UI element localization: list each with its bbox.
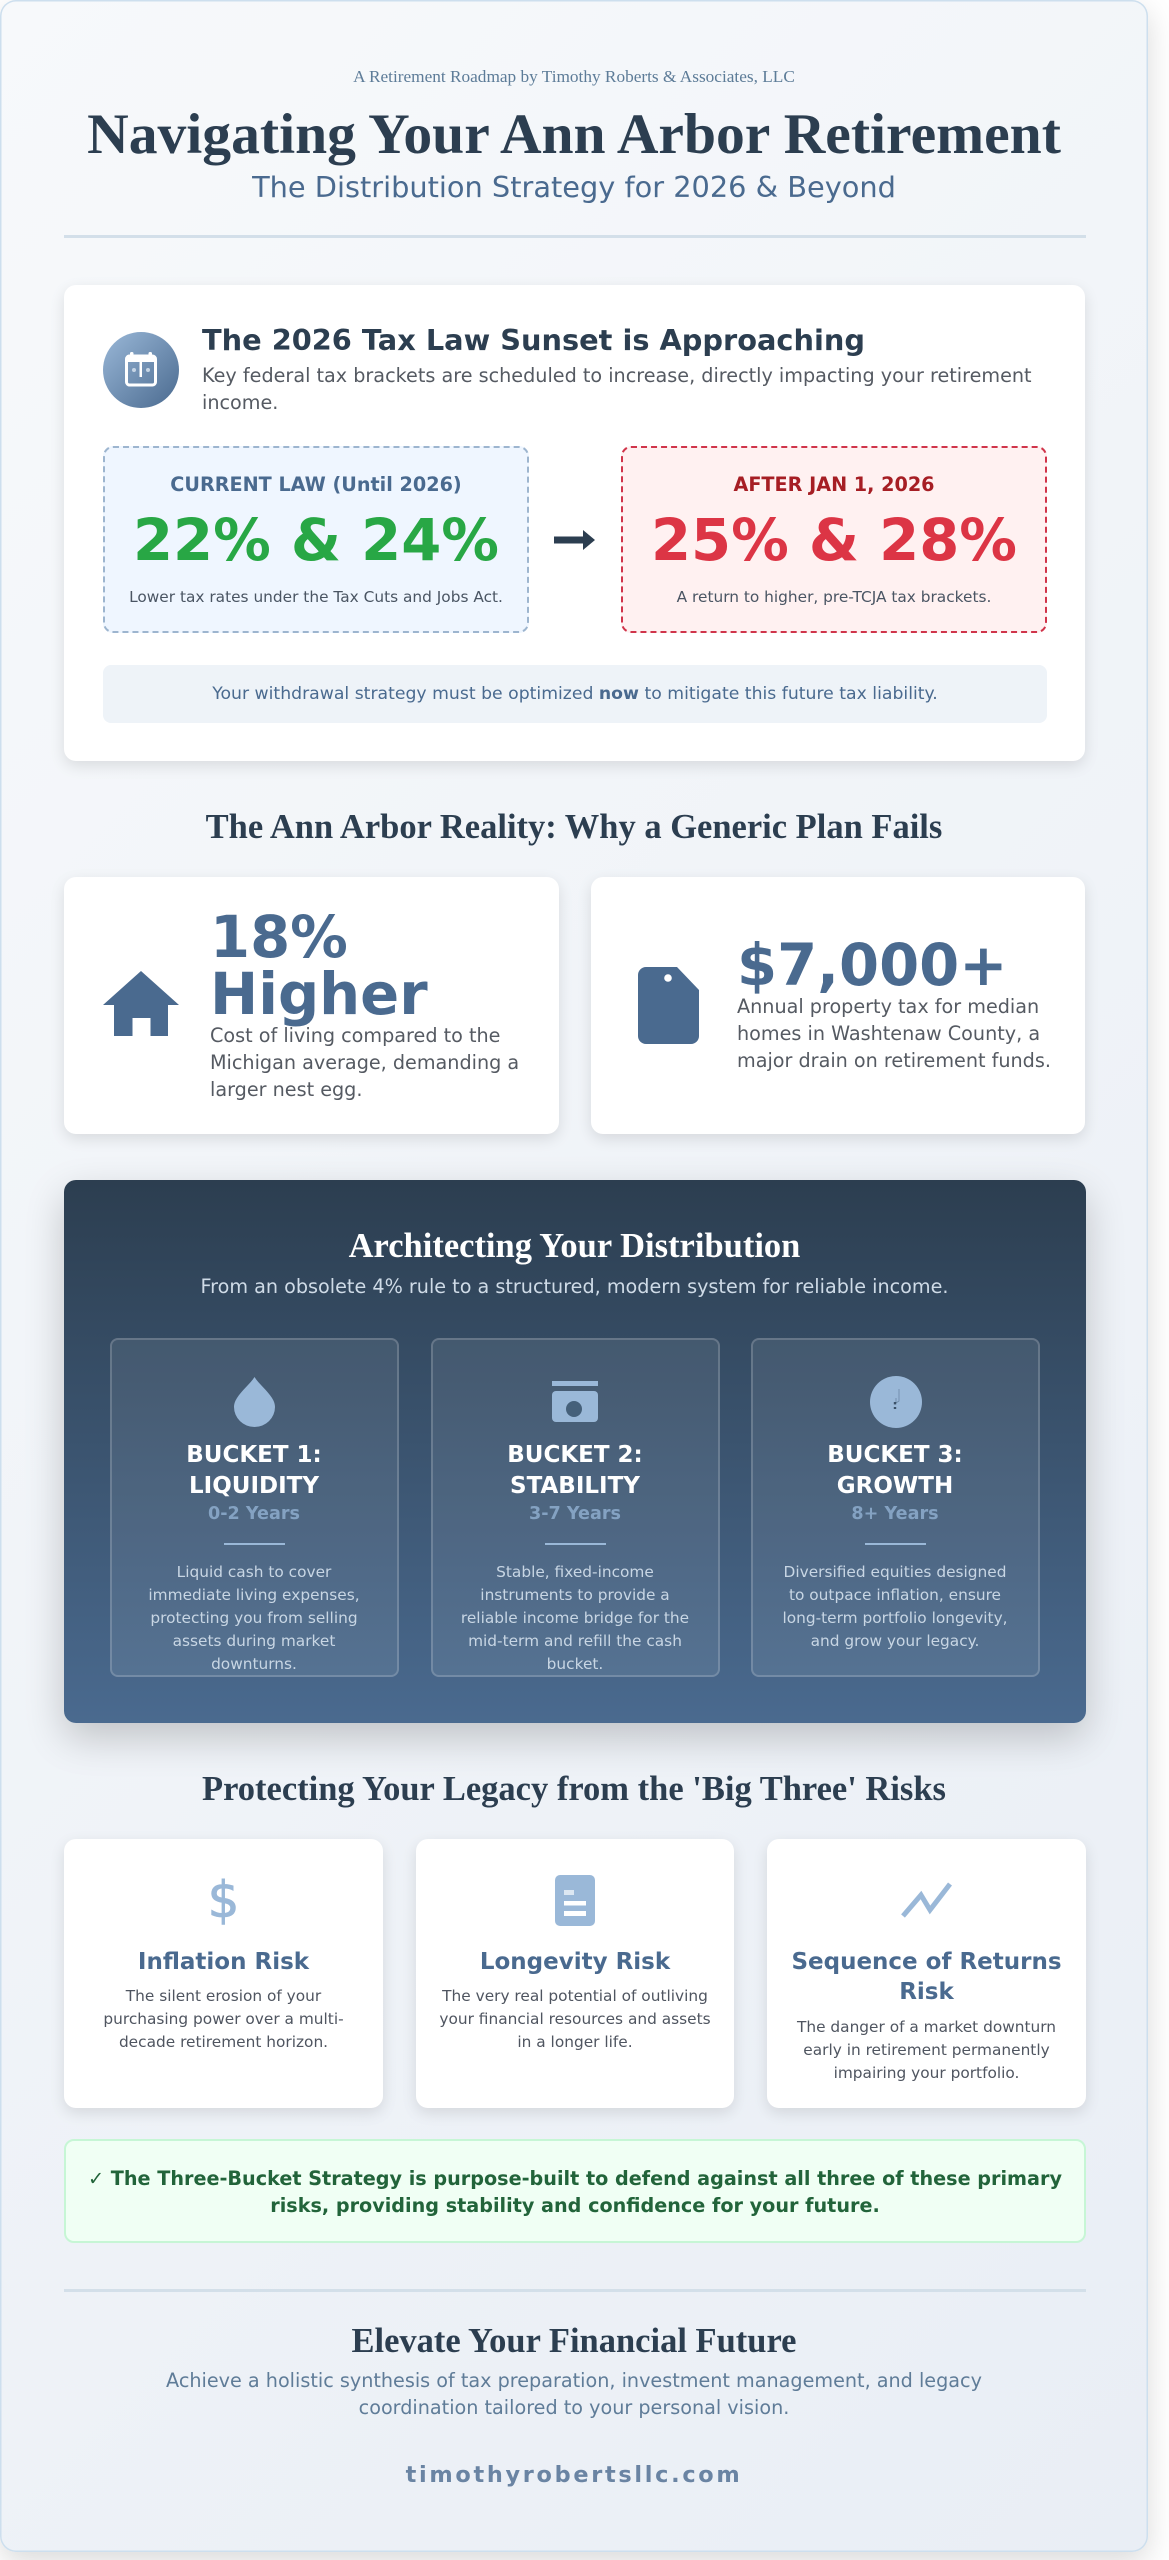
bucket description: Diversified equities designed [784, 1562, 1006, 1580]
risk description: The very real potential of outliving [442, 1986, 708, 2004]
stat description: Annual property tax for median [737, 995, 1039, 1018]
icon: water drop [234, 1377, 275, 1427]
bucket description: mid-term and refill the cash [468, 1632, 682, 1650]
icon: growth circle [870, 1376, 922, 1428]
bucket title: STABILITY [510, 1472, 640, 1498]
bucket title [827, 1442, 963, 1498]
bucket title [507, 1442, 643, 1498]
bucket title: BUCKET 1: [186, 1442, 322, 1468]
bucket description [782, 1562, 1008, 1650]
bucket description: long-term portfolio longevity, [782, 1608, 1008, 1626]
bucket description [461, 1562, 689, 1672]
callout: withdrawal strategy: Your withdrawal strategy must be optimized now to mitigate this future tax liability. [212, 684, 938, 704]
risk card: longevity [416, 1839, 734, 2108]
bucket description: assets during market [173, 1632, 335, 1650]
bucket years: 3-7 Years [529, 1504, 621, 1524]
bucket title: BUCKET 2: [507, 1442, 643, 1468]
panel: tax law sunset [64, 284, 1085, 760]
risk description: early in retirement permanently [803, 2040, 1050, 2058]
title: Navigating Your Ann Arbor Retirement [87, 103, 1061, 166]
bucket description: and grow your legacy. [811, 1632, 979, 1650]
current law label: CURRENT LAW (Until 2026) [170, 472, 462, 496]
bucket 3 [750, 1338, 1040, 1677]
panel: architecting your distribution [64, 1180, 1086, 1723]
bucket description: immediate living expenses, [148, 1586, 360, 1604]
stat description [210, 1024, 519, 1101]
intro text: Key federal tax brackets are scheduled to increase, directly impacting your retirement [202, 364, 1032, 386]
stat value: Higher [210, 961, 428, 1028]
stat value [210, 904, 428, 1028]
callout text [88, 2166, 1062, 2216]
intro text: income. [202, 390, 278, 414]
risk description: your financial resources and assets [439, 2010, 711, 2028]
stat description: homes in Washtenaw County, a [737, 1022, 1040, 1045]
after 2026 note: A return to higher, pre-TCJA tax brackets. [677, 588, 991, 606]
panel heading: Architecting Your Distribution [349, 1227, 800, 1265]
bucket description: bucket. [547, 1654, 603, 1672]
risk title: Sequence of Returns [791, 1949, 1062, 1975]
risk card: inflation [64, 1839, 383, 2108]
panel subheading: From an obsolete 4% rule to a structured, modern system for reliable income. [200, 1275, 949, 1298]
bucket description: reliable income bridge for the [461, 1608, 689, 1626]
risk description: The danger of a market downturn [797, 2018, 1056, 2036]
risk description [796, 2018, 1056, 2082]
callout text: ✓ The Three-Bucket Strategy is purpose-built to defend against all three of these primary [88, 2166, 1062, 2190]
website: timothyrobertsllc.com [406, 2462, 742, 2488]
risk description [103, 1986, 344, 2050]
bucket title [186, 1442, 322, 1498]
callout text: risks, providing stability and confidence for your future. [270, 2194, 880, 2216]
bucket title: BUCKET 3: [827, 1442, 963, 1468]
bucket title: LIQUIDITY [189, 1472, 319, 1498]
callout: withdrawal strategy [103, 664, 1047, 722]
risk title: Inflation Risk [138, 1949, 309, 1975]
bucket title: GROWTH [837, 1472, 953, 1498]
stat description [737, 995, 1051, 1072]
bucket 2 [430, 1338, 720, 1677]
icon: document [555, 1875, 595, 1926]
icon: dollar sign: $ [208, 1871, 239, 1929]
risk description: decade retirement horizon. [119, 2032, 328, 2050]
bucket 1 [110, 1338, 398, 1677]
future rates: 25% & 28% [651, 507, 1017, 574]
footer text [166, 2368, 982, 2418]
bucket description: instruments to provide a [480, 1586, 670, 1604]
risk card: sequence of returns [767, 1839, 1086, 2108]
heading: The 2026 Tax Law Sunset is Approaching [202, 323, 865, 357]
risk description: purchasing power over a multi- [103, 2010, 344, 2028]
current law box [103, 446, 529, 633]
heading: Ann Arbor reality: The Ann Arbor Reality: Why a Generic Plan Fails [206, 808, 942, 846]
heading: big three risks: Protecting Your Legacy from the 'Big Three' Risks [202, 1770, 946, 1808]
stat value: $7,000+ [737, 932, 1008, 999]
after 2026 label: AFTER JAN 1, 2026 [733, 472, 935, 496]
risk title: Risk [899, 1979, 954, 2005]
risk description: The silent erosion of your [126, 1986, 321, 2004]
stat description: major drain on retirement funds. [737, 1049, 1051, 1072]
bucket description: Stable, fixed-income [496, 1562, 654, 1580]
current law note: Lower tax rates under the Tax Cuts and Jobs Act. [129, 588, 503, 606]
icon: line chart [901, 1882, 952, 1918]
icon: price tag [638, 967, 699, 1044]
bucket description: to outpace inflation, ensure [789, 1586, 1001, 1604]
bucket description: Liquid cash to cover [177, 1562, 331, 1580]
stat card: cost of living [64, 877, 558, 1134]
intro text [202, 364, 1032, 414]
stat card: property tax [591, 877, 1085, 1134]
stat description: Cost of living compared to the [210, 1024, 500, 1047]
stat value: 18% [210, 904, 348, 971]
icon: cash box [552, 1381, 598, 1422]
bucket description: protecting you from selling [150, 1608, 358, 1626]
risk description: in a longer life. [517, 2032, 633, 2050]
risk title: Longevity Risk [480, 1949, 670, 1975]
icon: house [103, 971, 179, 1036]
icon: calendar [103, 332, 179, 408]
bucket years: 8+ Years [851, 1504, 939, 1524]
stat description: larger nest egg. [210, 1078, 362, 1101]
callout: three-bucket strategy [64, 2139, 1086, 2243]
risk title [791, 1949, 1062, 2005]
footer text: coordination tailored to your personal vision. [359, 2396, 789, 2418]
current rates: 22% & 24% [133, 507, 499, 574]
after 2026 box [621, 446, 1047, 633]
bucket years: 0-2 Years [208, 1504, 300, 1524]
bucket description [148, 1562, 360, 1672]
arrow [554, 530, 595, 550]
risk description [439, 1986, 711, 2050]
bucket description: downturns. [211, 1654, 297, 1672]
subtitle: The Distribution Strategy for 2026 & Beyond [252, 170, 896, 204]
footer heading: Elevate Your Financial Future [352, 2322, 796, 2360]
risk description: impairing your portfolio. [834, 2064, 1019, 2082]
eyebrow text: A Retirement Roadmap by Timothy Roberts & Associates, LLC [353, 67, 795, 86]
stat description: Michigan average, demanding a [210, 1051, 519, 1074]
footer text: Achieve a holistic synthesis of tax preparation, investment management, and legacy [166, 2368, 982, 2392]
